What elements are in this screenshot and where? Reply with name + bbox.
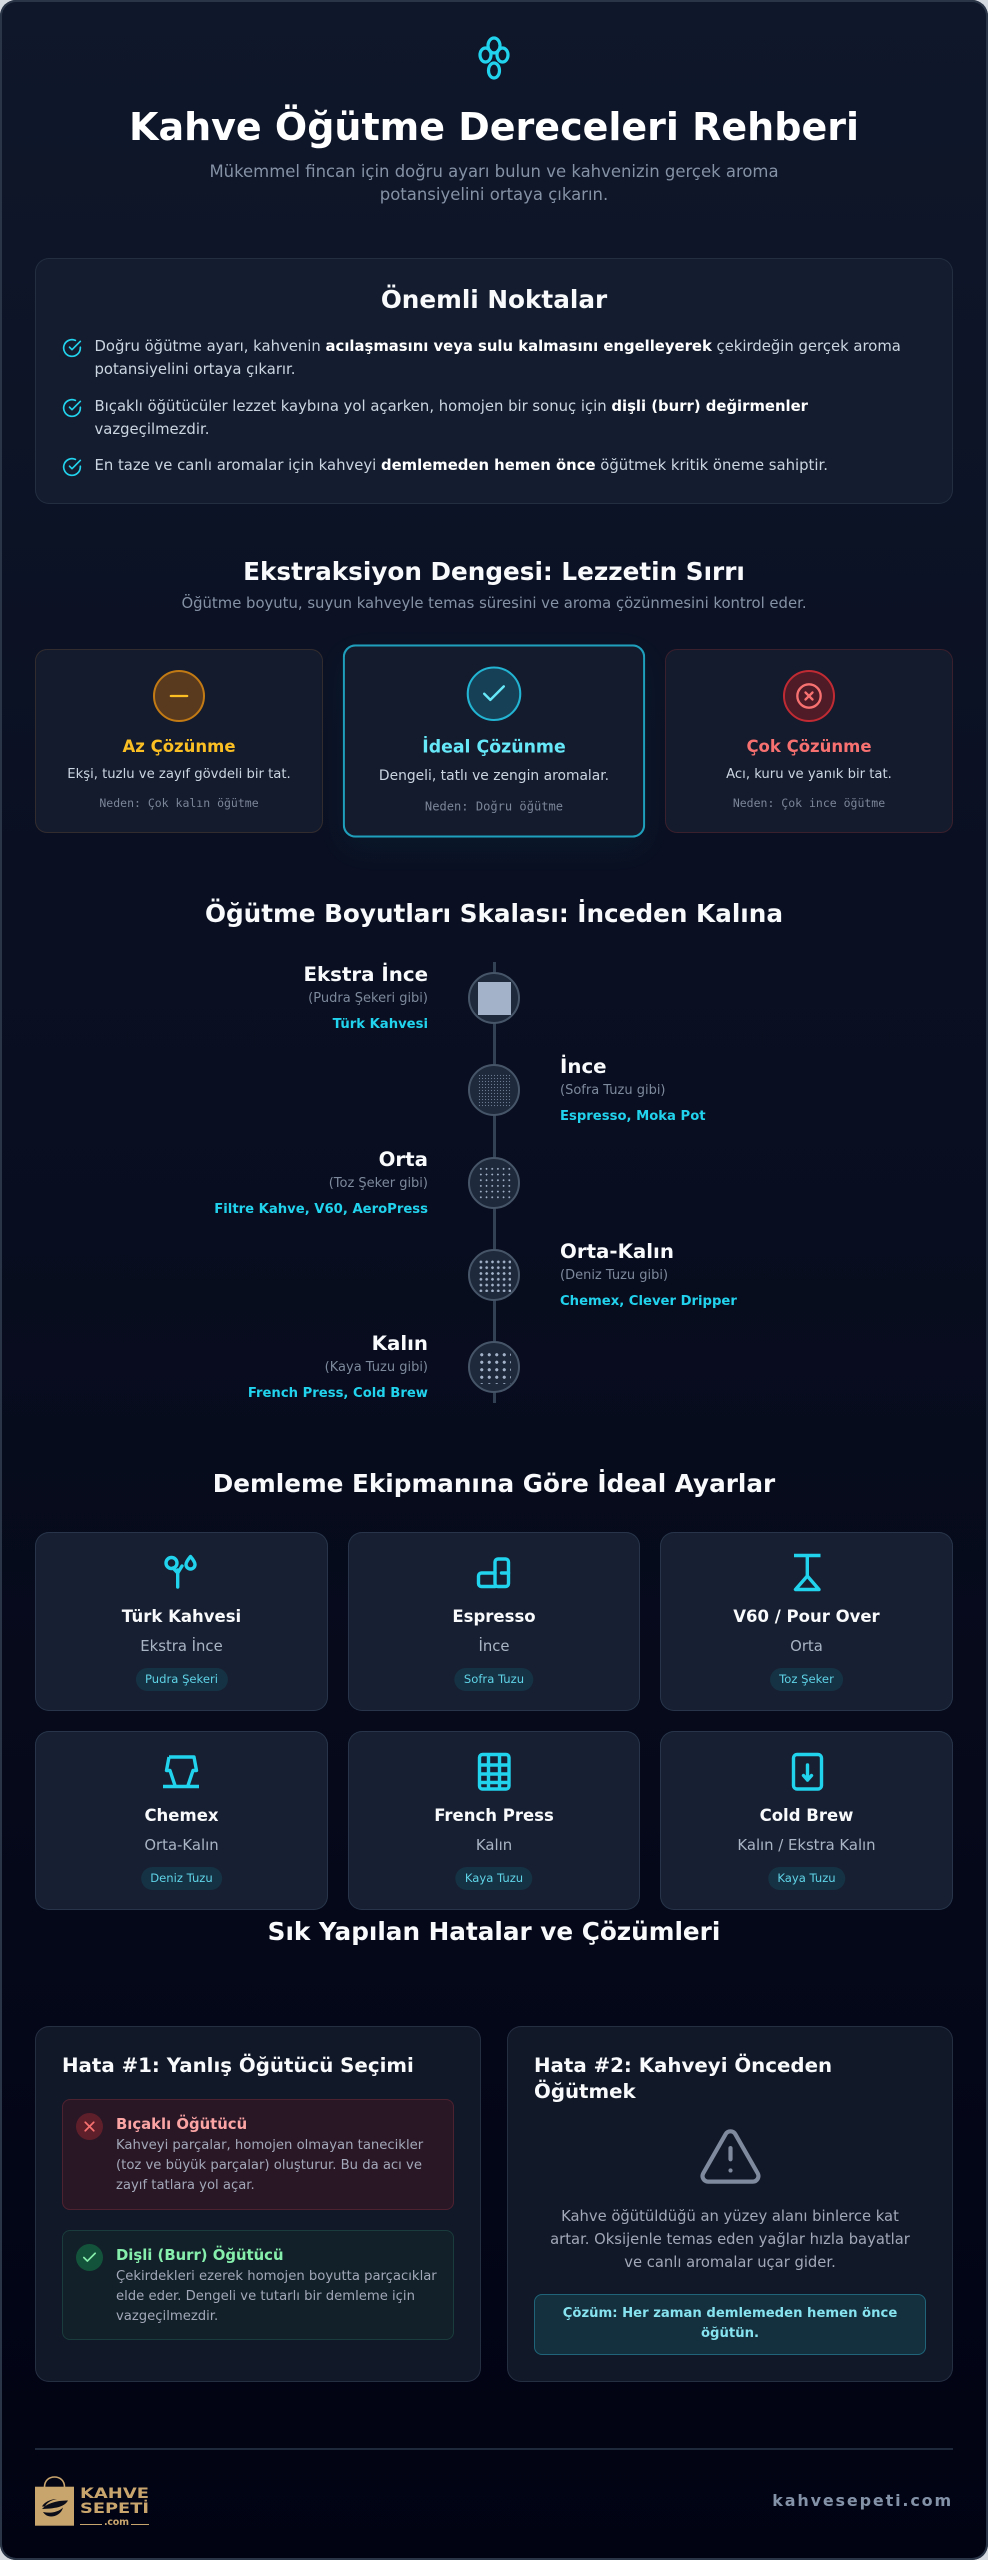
card title: French Press bbox=[434, 1806, 554, 1825]
level comparison: (Deniz Tuzu gibi) bbox=[560, 1268, 668, 1283]
subtitle bbox=[209, 162, 779, 204]
card title: Chemex bbox=[144, 1806, 219, 1825]
key point 2 bbox=[62, 398, 808, 438]
icon: check bbox=[62, 458, 82, 476]
key point text: En taze ve canlı aromalar için kahveyi demlemeden hemen önce öğütmek kritik öneme sahiptir. bbox=[94, 456, 828, 474]
mistake 2 title: Öğütmek bbox=[534, 2080, 636, 2103]
level name: Orta-Kalın bbox=[560, 1240, 674, 1263]
key point text: potansiyelini ortaya çıkarır. bbox=[94, 361, 296, 378]
icon: coffee grounds bbox=[478, 36, 510, 80]
key point text bbox=[94, 338, 901, 378]
blade grinder text bbox=[116, 2138, 424, 2193]
level name: İnce bbox=[560, 1055, 607, 1078]
mistake 2 text: Kahve öğütüldüğü an yüzey alanı binlerce kat bbox=[561, 2208, 899, 2225]
key point text: Bıçaklı öğütücüler lezzet kaybına yol açarken, homojen bir sonuç için dişli (burr) değirmenler bbox=[94, 398, 808, 414]
level: medium bbox=[214, 1148, 520, 1216]
card cause: Neden: Çok kalın öğütme bbox=[99, 796, 259, 810]
key point 1 bbox=[62, 338, 901, 378]
card title: Türk Kahvesi bbox=[122, 1607, 241, 1626]
card: turkish coffee bbox=[35, 1532, 328, 1711]
panel: key points bbox=[35, 258, 953, 504]
divider bbox=[35, 2448, 953, 2450]
level brew methods: Filtre Kahve, V60, AeroPress bbox=[214, 1202, 428, 1216]
footer bbox=[35, 2448, 953, 2526]
level brew methods: French Press, Cold Brew bbox=[248, 1386, 428, 1401]
comparison pill: Deniz Tuzu bbox=[150, 1871, 213, 1885]
key point text bbox=[94, 398, 808, 438]
key point text: Doğru öğütme ayarı, kahvenin acılaşmasını veya sulu kalmasını engelleyerek çekirdeğin gerçek aroma bbox=[94, 338, 901, 355]
blade grinder title: Bıçaklı Öğütücü bbox=[116, 2116, 247, 2133]
mistake 2 text bbox=[550, 2208, 910, 2271]
card title: Az Çözünme bbox=[122, 737, 236, 756]
level: coarse bbox=[248, 1332, 520, 1401]
subtitle: Mükemmel fincan için doğru ayarı bulun ve kahvenizin gerçek aroma bbox=[209, 162, 779, 181]
comparison pill: Sofra Tuzu bbox=[464, 1672, 524, 1686]
icon: cold brew bbox=[792, 1752, 824, 1791]
level name: Ekstra İnce bbox=[304, 963, 428, 986]
comparison pill bbox=[454, 1668, 534, 1691]
blade grinder text: (toz ve büyük parçalar) oluşturur. Bu da acı ve bbox=[116, 2158, 422, 2173]
grind swatch bbox=[468, 1341, 520, 1393]
card title: V60 / Pour Over bbox=[733, 1607, 880, 1626]
card: chemex bbox=[35, 1731, 328, 1910]
grind swatch bbox=[468, 1249, 520, 1301]
burr grinder text: Çekirdekleri ezerek homojen boyutta parçacıklar bbox=[116, 2269, 437, 2284]
card: french press bbox=[348, 1731, 640, 1910]
icon: turkish coffee bbox=[164, 1554, 197, 1589]
panel: mistake 1 bbox=[35, 2026, 481, 2382]
icon: check bbox=[467, 666, 521, 721]
card setting: Orta-Kalın bbox=[144, 1837, 219, 1854]
grind scale bbox=[214, 962, 737, 1403]
comparison pill bbox=[770, 1668, 843, 1691]
level brew methods: Türk Kahvesi bbox=[333, 1017, 428, 1032]
card: over extraction bbox=[665, 649, 953, 833]
icon: warning bbox=[700, 2129, 761, 2184]
icon: chemex bbox=[163, 1755, 199, 1788]
box: blade grinder bbox=[62, 2099, 454, 2210]
card: under extraction bbox=[35, 649, 323, 833]
mistake 2 title: Hata #2: Kahveyi Önceden bbox=[534, 2054, 832, 2077]
comparison pill bbox=[141, 1867, 222, 1890]
card cause: Neden: Doğru öğütme bbox=[425, 799, 563, 813]
blade grinder text: zayıf tatlara yol açar. bbox=[116, 2178, 255, 2193]
card title: Espresso bbox=[452, 1607, 536, 1626]
card setting: Kalın bbox=[476, 1837, 512, 1854]
icon: espresso bbox=[476, 1557, 510, 1588]
card setting: Orta bbox=[790, 1638, 823, 1655]
card title: Cold Brew bbox=[760, 1806, 853, 1825]
level name: Orta bbox=[379, 1148, 428, 1170]
icon: x circle bbox=[783, 670, 835, 722]
blade grinder text: Kahveyi parçalar, homojen olmayan tanecikler bbox=[116, 2138, 423, 2153]
level brew methods: Chemex, Clever Dripper bbox=[560, 1294, 737, 1309]
logo: Kahve Sepeti: KAHVE bbox=[80, 2486, 149, 2502]
logo: Kahve Sepeti bbox=[35, 2476, 149, 2526]
level name: Kalın bbox=[372, 1332, 428, 1355]
level: medium coarse bbox=[468, 1240, 737, 1309]
subheading: extraction: Öğütme boyutu, suyun kahveyle temas süresini ve aroma çözünmesini kontrol eder. bbox=[181, 595, 807, 612]
scale axis bbox=[492, 962, 496, 1403]
heading: equipment: Demleme Ekipmanına Göre İdeal Ayarlar bbox=[213, 1469, 775, 1498]
comparison pill bbox=[455, 1867, 533, 1890]
key point text: vazgeçilmezdir. bbox=[94, 421, 209, 438]
box: burr grinder bbox=[62, 2230, 454, 2340]
grind swatch bbox=[468, 1064, 520, 1116]
mistake 2 text: ve canlı aromalar uçar gider. bbox=[624, 2254, 836, 2271]
burr grinder text bbox=[116, 2269, 437, 2324]
mistake 2 title bbox=[534, 2054, 832, 2103]
card title: Çok Çözünme bbox=[746, 737, 872, 756]
comparison pill bbox=[768, 1867, 845, 1890]
level comparison: (Pudra Şekeri gibi) bbox=[308, 991, 428, 1006]
icon: minus bbox=[153, 670, 205, 722]
icon: french press bbox=[478, 1752, 511, 1791]
icon: check bbox=[76, 2244, 103, 2271]
card setting: Kalın / Ekstra Kalın bbox=[737, 1837, 876, 1854]
comparison pill: Kaya Tuzu bbox=[777, 1871, 836, 1885]
burr grinder text: elde eder. Dengeli ve tutarlı bir demleme için bbox=[116, 2289, 415, 2304]
card cause: Neden: Çok ince öğütme bbox=[733, 796, 885, 810]
solution text: öğütün. bbox=[701, 2326, 759, 2341]
solution text: Çözüm: Her zaman demlemeden hemen önce bbox=[563, 2306, 897, 2321]
logo: Kahve Sepeti: SEPETİ bbox=[80, 2500, 149, 2517]
comparison pill: Pudra Şekeri bbox=[145, 1672, 218, 1686]
grind swatch bbox=[468, 972, 520, 1024]
card: v60 bbox=[660, 1532, 953, 1711]
card: espresso bbox=[348, 1532, 640, 1711]
title: Kahve Öğütme Dereceleri Rehberi bbox=[129, 105, 859, 149]
icon: check bbox=[62, 338, 82, 358]
level: extra fine bbox=[304, 962, 520, 1032]
grind swatch bbox=[468, 1156, 520, 1208]
burr grinder text: vazgeçilmezdir. bbox=[116, 2309, 218, 2324]
card text: Acı, kuru ve yanık bir tat. bbox=[726, 767, 892, 782]
card title: İdeal Çözünme bbox=[422, 737, 566, 757]
card setting: İnce bbox=[478, 1638, 510, 1655]
card setting: Ekstra İnce bbox=[140, 1638, 223, 1655]
icon: cross bbox=[76, 2113, 103, 2140]
heading: grind scale: Öğütme Boyutları Skalası: İnceden Kalına bbox=[205, 899, 783, 928]
heading: key points: Önemli Noktalar bbox=[381, 285, 607, 314]
card text: Ekşi, tuzlu ve zayıf gövdeli bir tat. bbox=[67, 767, 291, 782]
card: ideal extraction bbox=[343, 644, 645, 838]
solution text bbox=[563, 2306, 897, 2341]
website: kahvesepeti.com bbox=[772, 2491, 953, 2510]
burr grinder title: Dişli (Burr) Öğütücü bbox=[116, 2247, 284, 2264]
heading: extraction: Ekstraksiyon Dengesi: Lezzetin Sırrı bbox=[243, 557, 745, 586]
level brew methods: Espresso, Moka Pot bbox=[560, 1109, 706, 1124]
heading: mistakes: Sık Yapılan Hatalar ve Çözümleri bbox=[268, 1917, 720, 1946]
key point 3 bbox=[62, 456, 828, 476]
solution box bbox=[534, 2294, 926, 2355]
mistake 2 text: artar. Oksijenle temas eden yağlar hızla bayatlar bbox=[550, 2231, 910, 2248]
level: fine bbox=[468, 1054, 706, 1124]
card: cold brew bbox=[660, 1731, 953, 1910]
comparison pill bbox=[135, 1668, 228, 1691]
level comparison: (Sofra Tuzu gibi) bbox=[560, 1083, 666, 1098]
card text: Dengeli, tatlı ve zengin aromalar. bbox=[379, 768, 609, 784]
level comparison: (Toz Şeker gibi) bbox=[329, 1176, 428, 1190]
subtitle: potansiyelini ortaya çıkarın. bbox=[380, 185, 608, 204]
header bbox=[129, 36, 859, 204]
panel: mistake 2 bbox=[507, 2026, 953, 2382]
comparison pill: Toz Şeker bbox=[779, 1672, 834, 1686]
level comparison: (Kaya Tuzu gibi) bbox=[325, 1360, 428, 1375]
icon: check bbox=[62, 398, 82, 418]
comparison pill: Kaya Tuzu bbox=[465, 1871, 523, 1885]
icon: v60 bbox=[794, 1554, 821, 1592]
mistake 1 title: Hata #1: Yanlış Öğütücü Seçimi bbox=[62, 2054, 414, 2077]
